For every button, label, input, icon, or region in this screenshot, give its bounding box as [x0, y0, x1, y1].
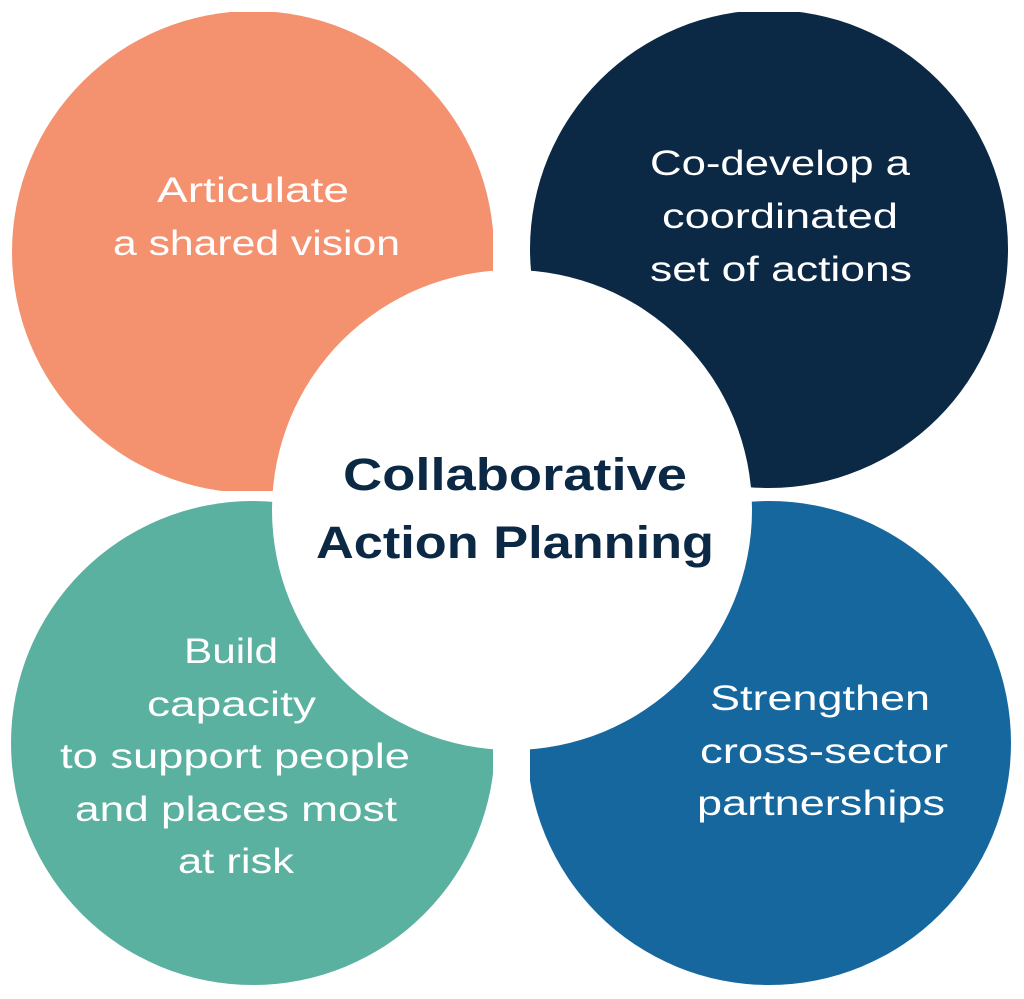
center circle [272, 270, 752, 750]
title: Action Planning [316, 517, 714, 568]
text: strengthen: partnerships [697, 784, 945, 823]
panel: strengthen partnerships [527, 501, 1011, 985]
panel: articulate a shared vision [12, 11, 494, 493]
panel: co-develop actions [530, 10, 1008, 488]
text: co-develop: coordinated [662, 197, 898, 236]
title: Collaborative [343, 449, 687, 500]
text: build capacity: to support people [60, 737, 410, 776]
text: build capacity: capacity [147, 685, 317, 724]
text: strengthen: cross-sector [700, 732, 948, 771]
text: articulate: a shared vision [113, 224, 400, 263]
text: articulate: Articulate [157, 171, 349, 210]
text: build capacity: and places most [75, 790, 397, 829]
text: co-develop: set of actions [650, 250, 912, 289]
text: co-develop: Co-develop a [650, 144, 911, 183]
text: build capacity: Build [184, 632, 278, 671]
text: strengthen: Strengthen [710, 679, 930, 718]
text: build capacity: at risk [178, 842, 295, 881]
panel: build capacity [11, 501, 495, 985]
